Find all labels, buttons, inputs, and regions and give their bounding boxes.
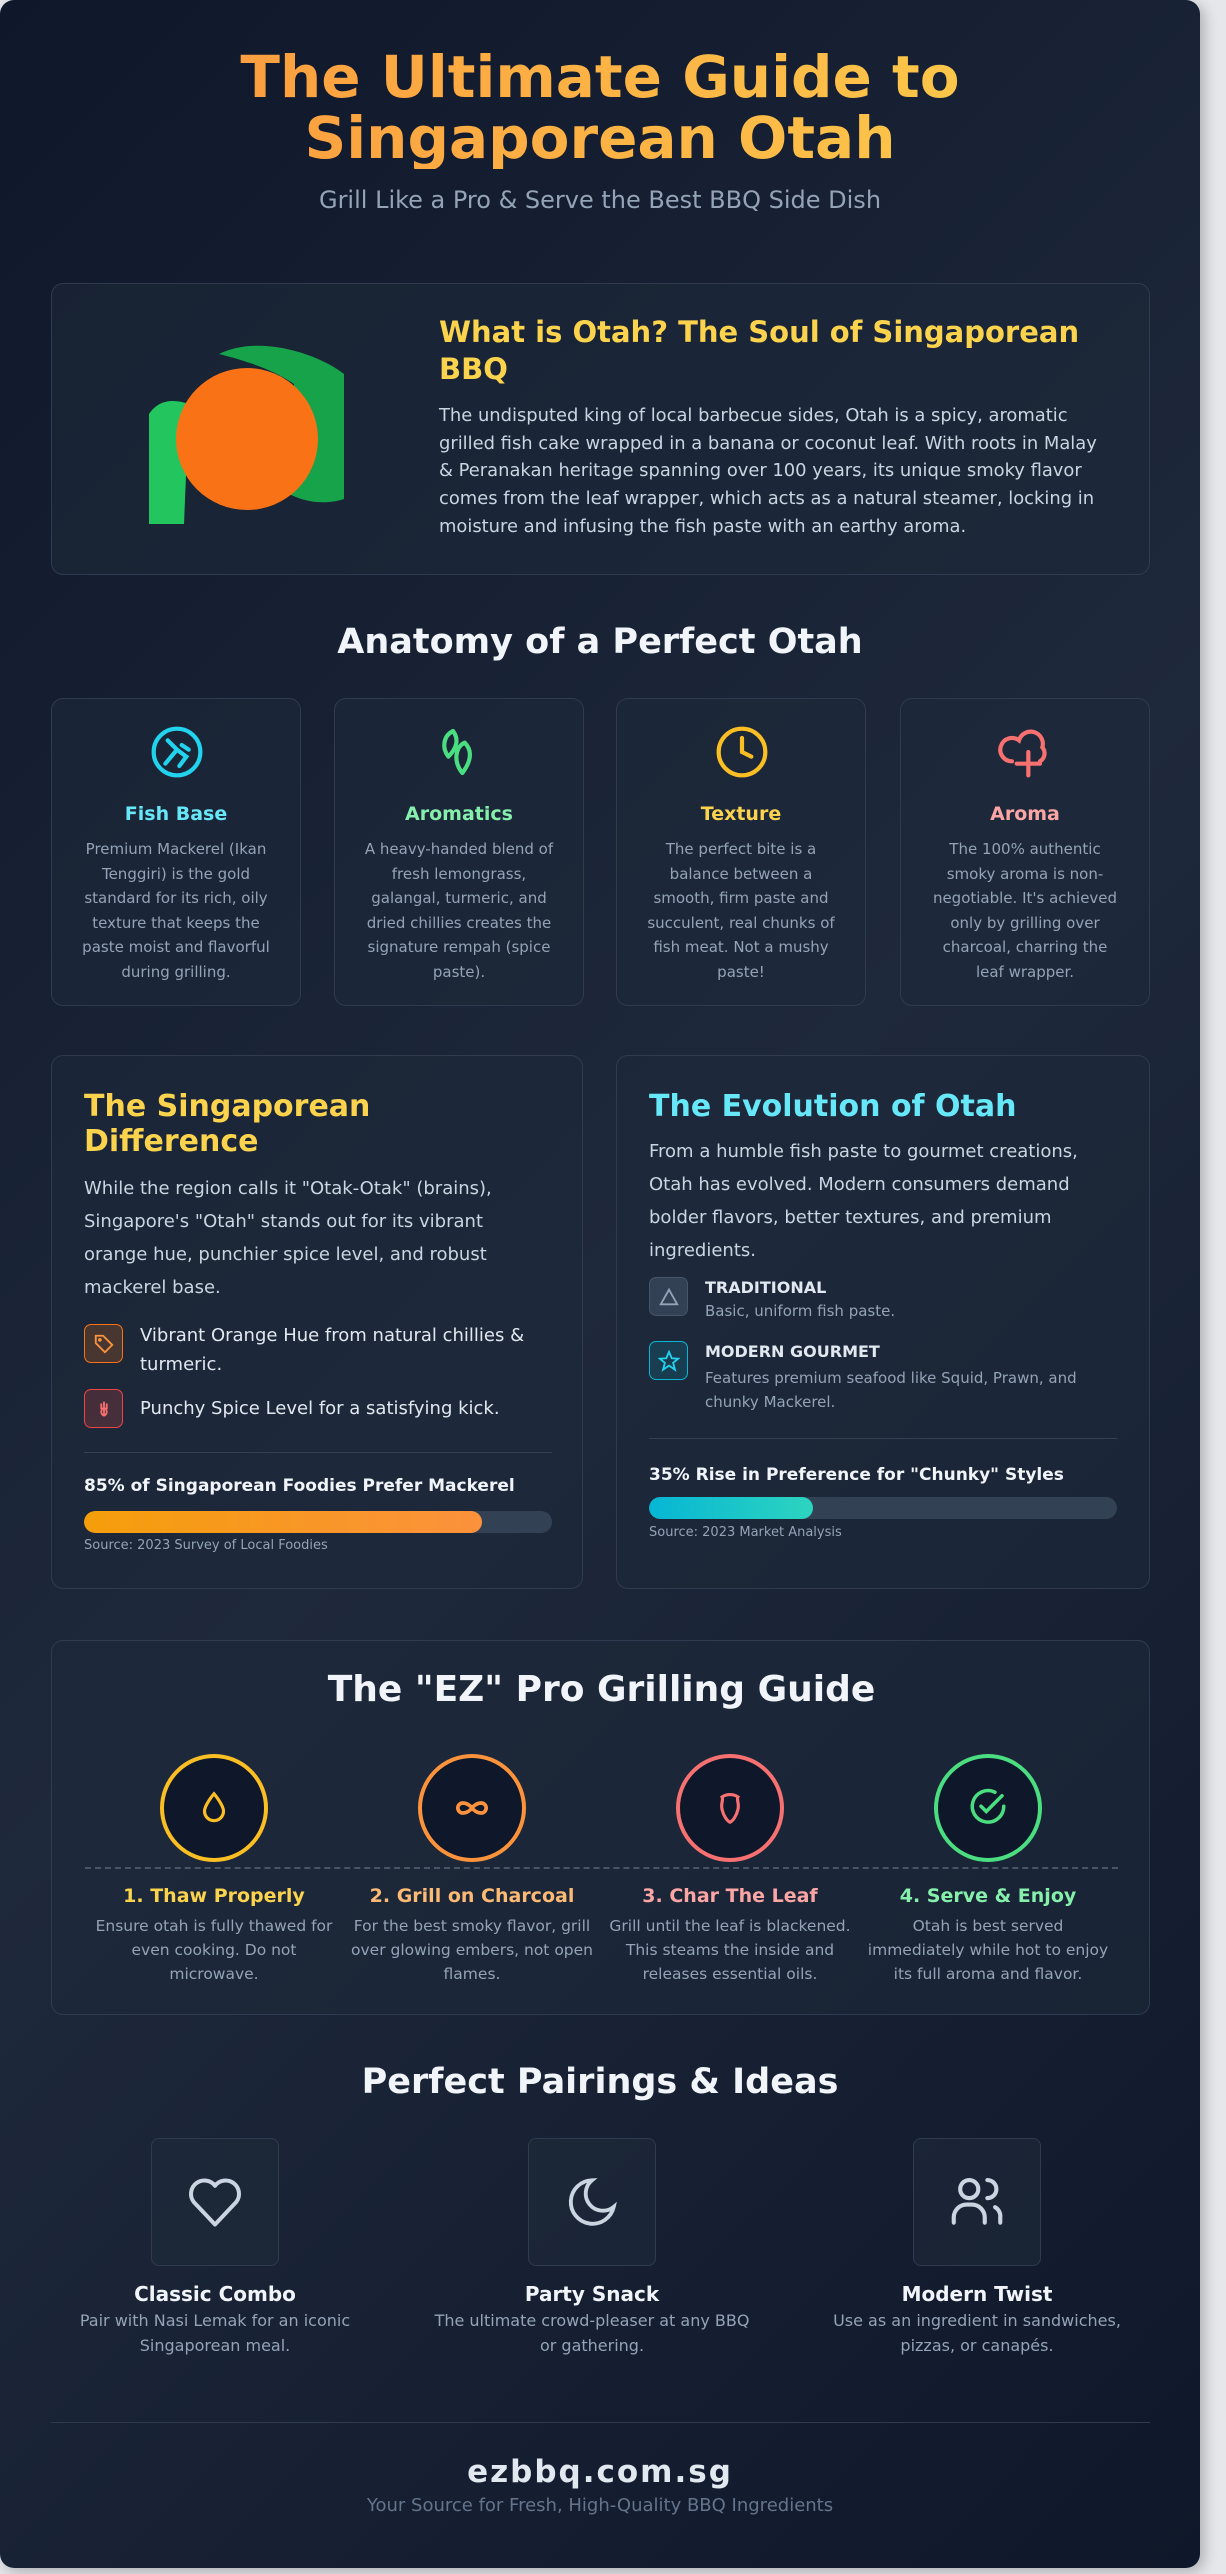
- bar chart: chunky preference: Source: 2023 Market Analysis: [649, 1525, 842, 1540]
- footer: Your Source for Fresh, High-Quality BBQ Ingredients: [367, 2495, 833, 2516]
- step 4: immediately while hot to enjoy its full aroma and flavor.: [868, 1941, 1108, 1983]
- paragraph: From a humble fish paste to gourmet creations, Otah has evolved. Modern consumers demand bolder flavors, better textures, and premium ingredients.: [649, 1141, 1078, 1261]
- heading: The Evolution of Otah: [649, 1089, 1016, 1124]
- icon: check: [934, 1754, 1042, 1862]
- icon: tag: [84, 1324, 123, 1363]
- item: modern gourmet: MODERN GOURMET: [705, 1342, 880, 1361]
- panel: aroma: [900, 698, 1150, 1006]
- icon: star: [649, 1341, 688, 1380]
- pairing: party snack: The ultimate crowd-pleaser at any BBQ or gathering.: [435, 2311, 749, 2355]
- step 1: Ensure otah is fully thawed for even cooking. Do not microwave.: [96, 1917, 332, 1983]
- title: Singaporean Otah: [304, 104, 896, 172]
- bar chart: mackerel preference: [84, 1476, 552, 1553]
- panel: aromatics: A heavy-handed blend of fresh lemongrass, galangal, turmeric, and dried chillies creates the signature rempah (spice paste).: [365, 840, 553, 980]
- heading: The Singaporean Difference: [84, 1089, 370, 1159]
- icon: infinity: [418, 1754, 526, 1862]
- panel: grilling guide: [51, 1640, 1150, 2015]
- heading: The "EZ" Pro Grilling Guide: [328, 1669, 875, 1710]
- heading: What is Otah? The Soul of Singaporean BBQ: [439, 315, 1079, 386]
- title: The Ultimate Guide to: [240, 43, 960, 111]
- icon: users: [913, 2138, 1041, 2266]
- step 3: 3. Char The Leaf: [642, 1885, 818, 1907]
- panel: aromatics: [334, 698, 584, 1006]
- panel: singaporean difference: [51, 1055, 583, 1589]
- pairing: modern twist: Modern Twist: [902, 2282, 1052, 2306]
- bar chart: chunky preference: [649, 1465, 1117, 1540]
- icon: heart: [151, 2138, 279, 2266]
- item: traditional: Basic, uniform fish paste.: [705, 1302, 895, 1320]
- icon: otah logo: [149, 346, 344, 524]
- panel: texture: [616, 698, 866, 1006]
- icon: cloud plus: [998, 730, 1047, 778]
- item: modern gourmet: [649, 1341, 1077, 1411]
- panel: fish base: Premium Mackerel (Ikan Tenggiri) is the gold standard for its rich, oily texture that keeps the paste moist and flavorful during grilling.: [82, 840, 270, 980]
- step 1: 1. Thaw Properly: [123, 1885, 305, 1907]
- panel: texture: The perfect bite is a balance between a smooth, firm paste and succulent, real chunks of fish meat. Not a mushy paste!: [647, 840, 835, 980]
- footer: ezbbq.com.sg: [467, 2454, 733, 2490]
- pairing: classic combo: [80, 2138, 350, 2355]
- item: traditional: [649, 1277, 895, 1320]
- panel: what is otah: [51, 283, 1150, 575]
- title: [0, 47, 1200, 169]
- panel: aromatics: Aromatics: [405, 803, 513, 825]
- step 1: [96, 1754, 332, 1983]
- step 4: [868, 1754, 1108, 1983]
- bar chart: mackerel preference: Source: 2023 Survey of Local Foodies: [84, 1538, 328, 1553]
- icon: leaf shield: [676, 1754, 784, 1862]
- step 4: 4. Serve & Enjoy: [900, 1885, 1076, 1907]
- icon: fish: [152, 726, 202, 778]
- icon: chilli: [84, 1389, 123, 1428]
- feature: orange hue: Vibrant Orange Hue from natural chillies & turmeric.: [140, 1325, 524, 1375]
- item: traditional: TRADITIONAL: [705, 1278, 826, 1297]
- step 3: [609, 1754, 851, 1983]
- footer: [367, 2454, 833, 2516]
- step 2: For the best smoky flavor, grill over glowing embers, not open flames.: [351, 1917, 593, 1983]
- step 3: Grill until the leaf is blackened. This steams the inside and releases essential oils.: [609, 1917, 851, 1983]
- step 4: Otah is best served: [913, 1917, 1063, 1935]
- pairing: modern twist: [833, 2138, 1121, 2355]
- panel: fish base: Fish Base: [125, 803, 227, 825]
- feature: spice level: Punchy Spice Level for a satisfying kick.: [140, 1398, 500, 1419]
- bar chart: mackerel preference: 85% of Singaporean Foodies Prefer Mackerel: [84, 1476, 515, 1496]
- icon: drop: [160, 1754, 268, 1862]
- icon: leaves: [442, 728, 472, 776]
- pairing: party snack: Party Snack: [525, 2282, 659, 2306]
- pairing: modern twist: Use as an ingredient in sandwiches, pizzas, or canapés.: [833, 2311, 1121, 2355]
- feature: spice level: [84, 1389, 500, 1428]
- panel: aroma: Aroma: [990, 803, 1060, 825]
- icon: clock: [716, 726, 768, 778]
- panel: fish base: [51, 698, 301, 1006]
- panel: aroma: The 100% authentic smoky aroma is non-negotiable. It's achieved only by grilling over charcoal, charring the leaf wrapper.: [933, 840, 1117, 980]
- pairing: classic combo: Pair with Nasi Lemak for an iconic Singaporean meal.: [80, 2311, 350, 2355]
- item: modern gourmet: Features premium seafood like Squid, Prawn, and chunky Mackerel.: [705, 1369, 1077, 1411]
- step 2: 2. Grill on Charcoal: [370, 1885, 574, 1907]
- pairing: party snack: [434, 2138, 749, 2355]
- panel: evolution: [616, 1055, 1150, 1589]
- step 2: [351, 1754, 593, 1983]
- bar chart: chunky preference: 35% Rise in Preference for "Chunky" Styles: [649, 1465, 1064, 1485]
- paragraph: The undisputed king of local barbecue sides, Otah is a spicy, aromatic grilled fish cake wrapped in a banana or coconut leaf. With roots in Malay & Peranakan heritage spanning over 100 years, its unique smoky flavor comes from the leaf wrapper, which acts as a natural steamer, locking in moisture and infusing the fish paste with an earthy aroma.: [439, 405, 1097, 537]
- icon: triangle: [649, 1277, 688, 1316]
- panel: texture: Texture: [701, 803, 781, 825]
- paragraph: While the region calls it "Otak-Otak" (brains), Singapore's "Otah" stands out for its vibrant orange hue, punchier spice level, and robust mackerel base.: [84, 1178, 492, 1298]
- heading: anatomy: Anatomy of a Perfect Otah: [337, 622, 863, 662]
- pairing: classic combo: Classic Combo: [134, 2282, 296, 2306]
- icon: moon: [528, 2138, 656, 2266]
- heading: pairings: Perfect Pairings & Ideas: [362, 2062, 838, 2102]
- subtitle: Grill Like a Pro & Serve the Best BBQ Side Dish: [319, 186, 881, 214]
